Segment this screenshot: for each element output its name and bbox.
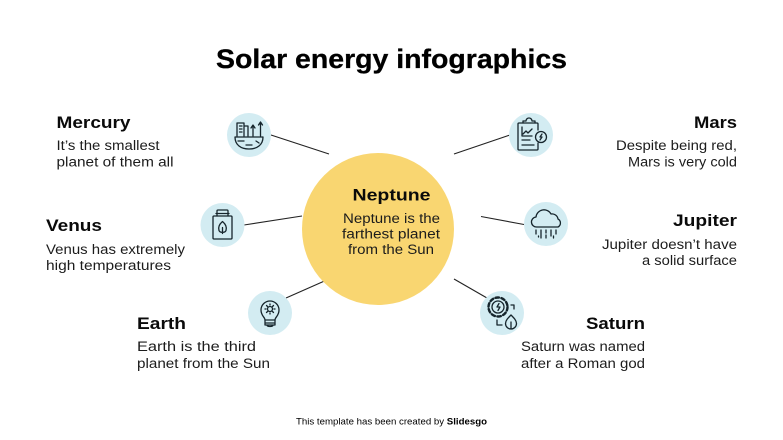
text: Mars: Despite being red, xyxy=(616,138,737,153)
text: Saturn: Saturn was named xyxy=(521,339,645,354)
central text: Neptune: farthest planet xyxy=(342,226,440,242)
text: Mercury: Mercury xyxy=(56,113,131,132)
text: Mars: Mars xyxy=(694,113,737,132)
central sun circle xyxy=(302,153,454,305)
icon: city with wind turbines xyxy=(227,113,271,157)
icon: light bulb xyxy=(248,291,292,335)
text: Mercury: planet of them all xyxy=(56,154,174,170)
text: Earth: planet from the Sun xyxy=(137,356,270,371)
text: Jupiter: Jupiter xyxy=(673,211,737,230)
text: Mars: Mars is very cold xyxy=(628,154,737,170)
text: Venus: Venus xyxy=(46,216,102,235)
footer credit: This template has been created by Slidesgo xyxy=(296,416,488,426)
connector lines xyxy=(244,135,524,298)
central text: Neptune xyxy=(342,186,440,257)
text: Earth: Earth xyxy=(137,314,186,333)
text: Mercury: It’s the smallest xyxy=(56,138,160,153)
icon: clipboard report with energy badge xyxy=(509,113,553,157)
title: Solar energy infographics xyxy=(216,44,567,74)
icon: battery bag with leaf xyxy=(200,203,244,247)
icon: gear with water drop xyxy=(480,291,524,335)
text: Saturn: after a Roman god xyxy=(521,356,645,371)
text: Venus xyxy=(46,216,185,273)
text: Venus: Venus has extremely xyxy=(46,242,185,257)
central text: Neptune: Neptune is the xyxy=(343,211,440,226)
icon: rain cloud xyxy=(524,202,568,246)
text: Mercury xyxy=(56,113,174,170)
text: Saturn xyxy=(521,314,645,371)
central text: Neptune: from the Sun xyxy=(348,242,434,257)
text: Jupiter xyxy=(602,211,737,268)
text: Earth: Earth is the third xyxy=(137,339,256,354)
text: Earth xyxy=(137,314,270,371)
central text: Neptune: Neptune xyxy=(352,186,430,204)
text: Venus: high temperatures xyxy=(46,258,171,273)
text: Jupiter: Jupiter doesn’t have xyxy=(602,237,737,252)
text: Saturn: Saturn xyxy=(586,314,645,333)
text: Jupiter: a solid surface xyxy=(642,253,737,268)
text: Mars xyxy=(616,113,737,170)
